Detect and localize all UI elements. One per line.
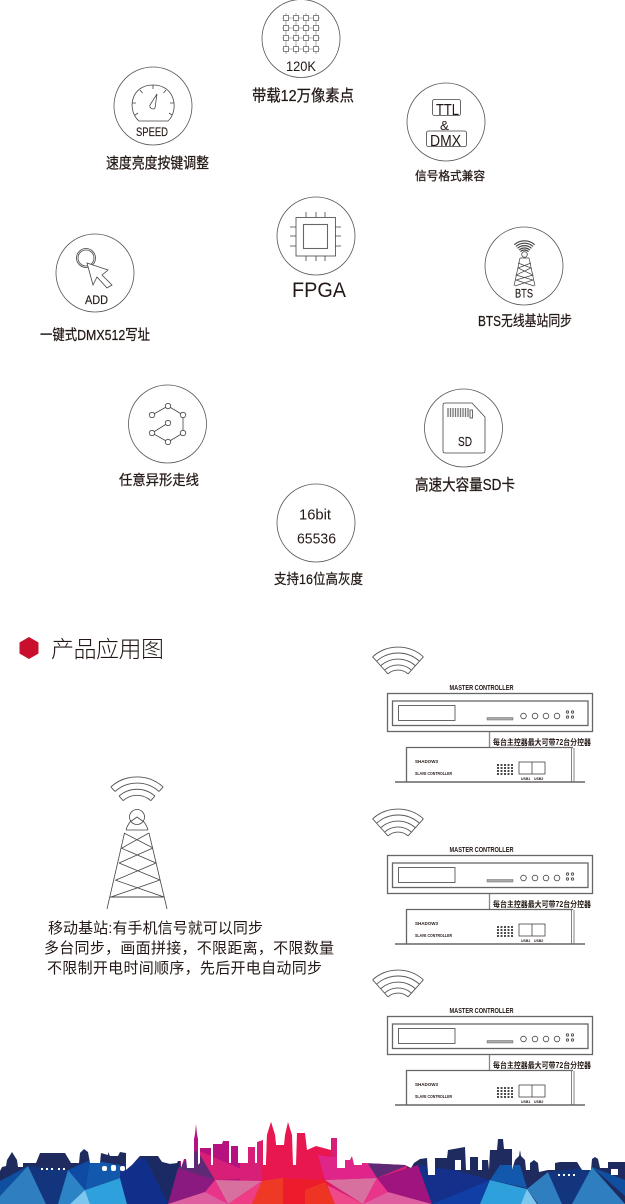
icon: 16bit 65536 [277, 484, 355, 562]
master controller: MASTER CONTROLLER [450, 1006, 514, 1015]
icon: signal waves [373, 809, 423, 836]
label: wiring: 任意异形走线 [119, 472, 199, 488]
text block: base station description: 移动基站:有手机信号就可以同步 [48, 920, 263, 937]
feature: add [40, 234, 150, 344]
icon: SD card: SD [458, 435, 472, 449]
icon: speed gauge: SPEED [136, 127, 168, 139]
slave controller [395, 1070, 585, 1105]
master controller: MASTER CONTROLLER [450, 845, 514, 854]
controller group 2 [373, 809, 592, 944]
feature: BTS sync [478, 227, 572, 330]
label: SD card: 高速大容量SD卡 [415, 476, 515, 494]
controller group 3 [373, 970, 592, 1105]
slave controller: SHADOW3 [415, 921, 438, 926]
text block: base station description: 多台同步，画面拼接，不限距离，不限数量 [44, 940, 334, 957]
feature: speed [106, 67, 209, 172]
text block: base station description: 不限制开电时间顺序，先后开电自动同步 [47, 960, 322, 977]
feature: SD card [415, 389, 515, 494]
label: add: 一键式DMX512写址 [40, 327, 150, 344]
slave controller: USB1 [521, 1100, 530, 1104]
icon: hexagon wiring [128, 385, 206, 463]
icon: TTL and DMX: TTL [436, 102, 459, 119]
icon: TTL and DMX [407, 83, 485, 161]
feature: FPGA [277, 197, 355, 302]
feature: 120K pixels [252, 0, 354, 105]
slave controller: SLAVE CONTROLLER [415, 933, 453, 938]
right polygons [305, 1182, 335, 1204]
master controller [388, 683, 592, 747]
icon: 120K pixel grid: 120K [286, 58, 317, 74]
icon: TTL and DMX: & [440, 118, 449, 133]
note: max 72 slaves: 每台主控器最大可带72台分控器 [493, 899, 591, 909]
label: 120K: 带载12万像素点 [252, 87, 354, 105]
note: max 72 slaves: 每台主控器最大可带72台分控器 [493, 1060, 591, 1070]
skyline: low-poly city footer [0, 1120, 625, 1204]
icon: 16bit 65536: 65536 [297, 532, 336, 548]
slave controller: SHADOW3 [415, 759, 438, 764]
slave controller: USB1 [521, 777, 530, 781]
slave controller [395, 910, 585, 944]
slave controller: USB2 [534, 777, 543, 781]
controller group 1 [373, 647, 592, 782]
slave controller: USB2 [534, 939, 543, 943]
feature: arbitrary wiring [119, 385, 206, 488]
icon: lattice tower [107, 810, 167, 909]
label: FPGA: FPGA [292, 279, 346, 302]
slave controller: SLAVE CONTROLLER [415, 1094, 453, 1099]
left polygons [0, 1166, 28, 1196]
label: signal format: 信号格式兼容 [415, 168, 485, 183]
icon: signal waves [373, 970, 423, 997]
icon: TTL and DMX: DMX [430, 133, 462, 150]
feature: signal format [407, 83, 485, 183]
icon: BTS tower: BTS [515, 286, 533, 300]
gate and palace windows [41, 1160, 618, 1176]
slave controller [395, 748, 585, 782]
note: max 72 slaves: 每台主控器最大可带72台分控器 [493, 737, 591, 747]
label: grayscale: 支持16位高灰度 [274, 571, 363, 587]
slave controller: SHADOW3 [415, 1082, 438, 1087]
icon: signal waves [111, 777, 163, 801]
feature: 16 bit grayscale [274, 484, 363, 587]
text block: base station description [44, 920, 334, 977]
label: speed: 速度亮度按键调整 [106, 155, 209, 172]
base station tower [107, 777, 167, 909]
master controller [388, 845, 592, 909]
slave controller: USB2 [534, 1100, 543, 1104]
icon: FPGA chip [277, 197, 355, 275]
master controller: MASTER CONTROLLER [450, 683, 514, 692]
icon: 16bit 65536: 16bit [299, 508, 331, 524]
label: BTS sync: BTS无线基站同步 [478, 313, 572, 330]
heading: application diagram: 产品应用图 [51, 636, 164, 662]
master controller [388, 1006, 592, 1070]
icon: one-key cursor: ADD [85, 295, 108, 307]
slave controller: USB1 [521, 939, 530, 943]
icon: red hexagon [20, 637, 38, 659]
icon: signal waves [373, 647, 423, 674]
slave controller: SLAVE CONTROLLER [415, 771, 453, 776]
